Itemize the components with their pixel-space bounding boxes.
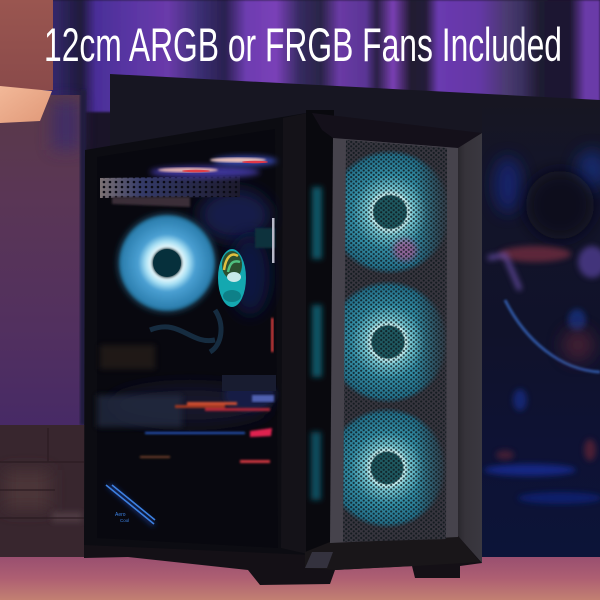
front chamfer right (458, 133, 482, 563)
brick ledge (0, 425, 86, 560)
rear rgb cooling fan (117, 213, 217, 313)
front fan 3 (343, 408, 444, 528)
dark backdrop panel (110, 74, 600, 560)
front lower bezel (305, 536, 480, 570)
front fan 2 (344, 281, 446, 403)
abstract painting on the right (482, 102, 600, 560)
front corner pillar (281, 112, 312, 555)
pc case (84, 110, 482, 585)
corner cyan led strip (306, 110, 334, 562)
lower left grey wedge (305, 552, 333, 568)
ram and board details (222, 218, 276, 402)
blue lit logo on glass (106, 485, 155, 526)
front fan 1 (345, 150, 447, 274)
side panel frame (84, 112, 312, 555)
right fade (417, 162, 447, 514)
front top bezel (312, 113, 482, 148)
glass side panel interior (97, 129, 278, 548)
top fan glow (150, 156, 277, 178)
pink reflection (393, 239, 417, 261)
table lamp (0, 0, 53, 123)
aio pump head (218, 249, 246, 307)
purple curtain background (0, 0, 600, 112)
mesh front panel (327, 138, 458, 543)
blue lit logo on glass: Aero (115, 512, 126, 518)
perforated shroud strip (100, 176, 240, 207)
front fans group (343, 150, 447, 528)
case feet and base (84, 525, 482, 585)
blue lit logo on glass: Cool (120, 518, 129, 523)
coolant tubes (150, 310, 221, 352)
wooden table top (0, 557, 600, 600)
graphics card lights (140, 402, 272, 463)
left wall curtain (0, 90, 86, 427)
mesh perforation (343, 140, 447, 542)
